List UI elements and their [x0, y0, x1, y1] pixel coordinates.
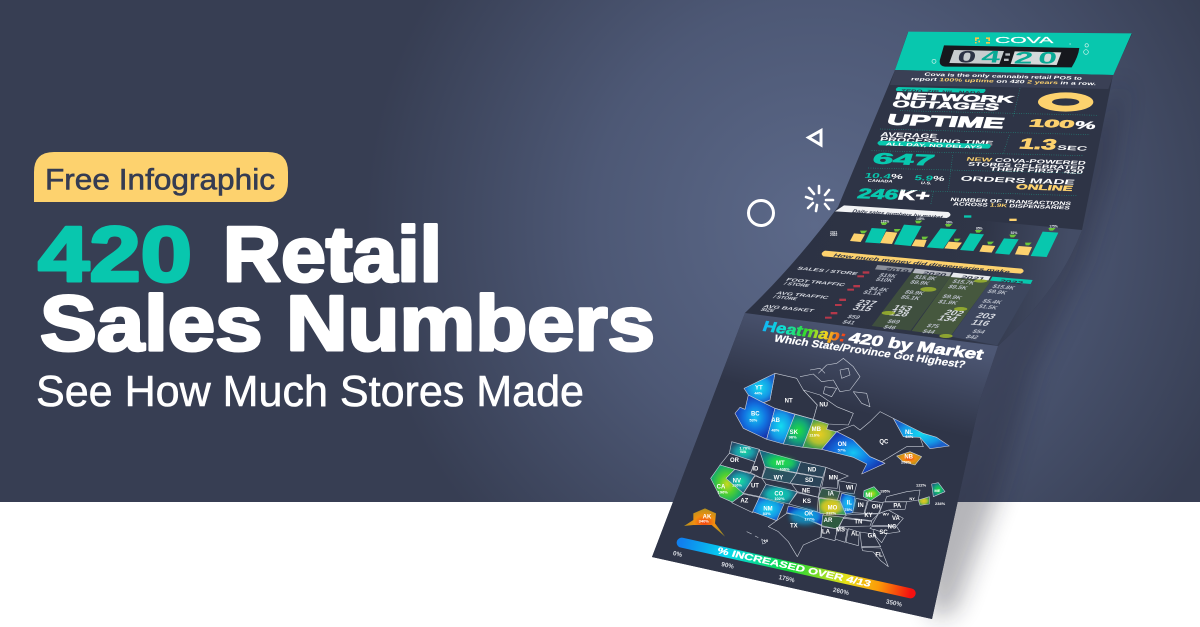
- subtitle: See How Much Stores Made: [36, 367, 584, 416]
- state labels: 232%: [826, 510, 837, 515]
- state labels: OR: [730, 458, 740, 464]
- stat: canada: [863, 172, 905, 184]
- province labels: 53%: [749, 417, 758, 422]
- table: row labels: AVG TRAFFIC: [774, 291, 831, 301]
- state labels: TX: [790, 524, 798, 530]
- table: values 2022: $1.5K: [976, 304, 999, 311]
- state labels: CO: [774, 492, 784, 498]
- state labels: UT: [751, 484, 759, 490]
- state labels: 122%: [916, 482, 927, 487]
- heading line 1: 420 by Market: [846, 331, 986, 363]
- NB: [897, 452, 922, 465]
- table: values 2019: [840, 273, 898, 326]
- table: row labels: / STORE: [771, 295, 800, 302]
- pill: zero zip nil nada: ZERO, ZIP, NIL, NADA: [900, 88, 982, 95]
- table heading pill: [822, 251, 1024, 275]
- province labels: NL: [905, 430, 913, 436]
- state labels: MS: [836, 528, 845, 534]
- table: values 2020: $46: [881, 325, 898, 331]
- province labels: [749, 385, 914, 464]
- table: values 2021: $9.5K: [946, 284, 969, 291]
- state labels: KY: [864, 513, 873, 519]
- table: values 2020: 128: [887, 309, 911, 319]
- state labels: AR: [824, 518, 833, 524]
- province labels: ON: [838, 442, 847, 448]
- state labels: WV: [883, 512, 889, 517]
- state labels: 340%: [699, 519, 709, 524]
- flip clock: 04:20: [940, 45, 1079, 68]
- logo: COVA: COVA: [995, 35, 1054, 45]
- state labels: AL: [851, 531, 859, 537]
- table: year headers: 2019: [883, 267, 910, 275]
- text: intro: Cova is the only cannabis retail POS to: [923, 72, 1083, 82]
- table: values 2019: $59: [845, 314, 862, 321]
- table: values 2022: 116: [968, 319, 992, 328]
- state labels: [699, 445, 946, 559]
- heat glows: [766, 458, 855, 525]
- intro band: [890, 70, 1113, 89]
- table: values 2019: $4.4K: [867, 286, 890, 293]
- text: number of transactions: [949, 197, 1073, 211]
- state labels: IN: [858, 503, 864, 509]
- SK: [783, 414, 813, 447]
- heatmap: map of Canada and USA (zoom space): [672, 358, 949, 609]
- province labels: NU: [819, 403, 828, 409]
- bar chart: 145%: [916, 217, 925, 221]
- table: values 2020: $9.9K: [908, 280, 931, 287]
- arctic islands: [800, 358, 870, 407]
- bar chart: 2021: [830, 230, 838, 234]
- state labels: OK: [804, 512, 814, 518]
- Alaska: [684, 508, 725, 537]
- chart heading banner: [835, 205, 950, 221]
- state labels: NM: [763, 506, 773, 512]
- text: orders made online: [959, 175, 1076, 193]
- flip clock: 04:20: 0: [1037, 49, 1059, 68]
- NT: [763, 373, 817, 419]
- state labels: VA: [892, 516, 901, 522]
- YT: [744, 373, 775, 403]
- bar chart: 52%: [1011, 231, 1017, 235]
- legend: scale labels: 0%: [672, 550, 683, 559]
- table: values 2021: $15.7K: [950, 279, 976, 286]
- table: values 2021: [920, 279, 976, 335]
- table: values 2020: 153: [890, 304, 915, 314]
- state labels: NY: [909, 496, 915, 501]
- panel: heatmap background: [652, 313, 998, 619]
- province labels: MB: [812, 427, 822, 433]
- province labels: 57%: [838, 447, 846, 452]
- table: row labels: [759, 266, 860, 314]
- panel: stats (zoom space): [855, 32, 1132, 211]
- legend: scale labels: [672, 550, 903, 609]
- stat: us: 5.9 %: [913, 174, 947, 183]
- state labels: ID: [752, 467, 759, 473]
- badge: Free Infographic: [34, 152, 288, 202]
- table: values 2020: $5.1K: [899, 295, 922, 302]
- table: values 2020: $9.9K: [903, 290, 926, 297]
- text: number of transactions: ACROSS 1.9K DISPENSARIES: [952, 201, 1071, 211]
- table: values 2022: $42: [964, 334, 980, 341]
- state labels: MT: [776, 461, 785, 467]
- map: Canada: [735, 358, 949, 474]
- table: highlight markers: [882, 279, 987, 338]
- state labels: ME: [934, 488, 941, 493]
- pill: all day, no delays: [877, 141, 991, 150]
- state labels: 78%: [844, 507, 853, 512]
- state labels: 177%: [804, 516, 815, 521]
- province labels: NT: [785, 398, 793, 404]
- table: year headers: [875, 265, 1033, 286]
- text: average processing time: AVERAGE: [879, 131, 939, 140]
- province labels: 48%: [771, 428, 780, 433]
- text: orders made online: ONLINE: [1015, 182, 1074, 193]
- state labels: CA: [717, 484, 726, 490]
- bar chart: 85%: [976, 226, 983, 230]
- state labels: GA: [868, 534, 877, 540]
- AB: [767, 408, 795, 444]
- province labels: BC: [751, 411, 760, 417]
- text: average processing time: [879, 131, 995, 147]
- NU: [803, 390, 853, 425]
- state labels: KS: [803, 499, 811, 505]
- province labels: 96%: [789, 435, 797, 440]
- table: values 2020: $69: [885, 319, 902, 325]
- chart heading banner: Daily sales numbers by market: [850, 209, 944, 221]
- state labels: 1.70%: [739, 445, 751, 450]
- table: values 2021: $75: [925, 323, 941, 330]
- table: values 2022: $54: [970, 329, 987, 335]
- table: values 2022: $9.9K: [985, 289, 1008, 296]
- bar chart: [830, 217, 1058, 257]
- icon: circle: [748, 200, 774, 226]
- title: 420 Retail Sales Numbers: Sales Numbers: [40, 279, 655, 367]
- province labels: 216%: [809, 433, 820, 438]
- flip clock: 04:20: 4: [980, 48, 1003, 67]
- state labels: MN: [829, 476, 838, 482]
- state labels: HI: [764, 538, 768, 543]
- text: 100%: 100: [1027, 118, 1076, 131]
- flip clock: 04:20: 0: [956, 47, 978, 66]
- state labels: NV: [733, 478, 741, 484]
- text: 100%: %: [1073, 120, 1098, 132]
- text: 246K+: 246 K+: [855, 186, 932, 204]
- state labels: 83%: [763, 511, 771, 516]
- state labels: 116%: [732, 482, 742, 487]
- panel: bar chart and table (zoom space): [759, 205, 1058, 345]
- icon: triangle: [808, 130, 821, 145]
- text: 647: 647: [870, 151, 936, 169]
- text: new cova stores: NEW COVA-POWERED: [965, 157, 1087, 167]
- chart legend: [964, 215, 1017, 221]
- table: values 2022: $5.4K: [980, 299, 1003, 306]
- table: values 2020: [881, 275, 938, 331]
- state labels: 106%: [779, 467, 790, 472]
- bar chart: 2022: [830, 233, 838, 237]
- state labels: NE: [802, 489, 810, 495]
- table: values 2019: $1.1K: [861, 290, 884, 297]
- province labels: SK: [790, 430, 799, 436]
- BC: [735, 395, 775, 439]
- table: values 2022: 203: [973, 312, 998, 321]
- state labels: 102%: [774, 496, 785, 501]
- stat: canada: CANADA: [867, 179, 894, 184]
- map: United States: [684, 442, 946, 567]
- text: network outages: OUTAGES: [891, 99, 1002, 113]
- state labels: FL: [875, 553, 883, 559]
- legend: scale labels: 350%: [885, 598, 903, 609]
- state labels: 234%: [935, 501, 946, 506]
- state labels: 196%: [718, 490, 728, 495]
- text: orders made online: ORDERS MADE: [959, 175, 1076, 187]
- state labels: IL: [847, 500, 852, 506]
- state labels: NC: [888, 524, 897, 530]
- badge: Free Infographic: Free Infographic: [45, 164, 275, 196]
- stat: us: [913, 174, 947, 185]
- table: row labels: SALES / STORE: [795, 266, 860, 277]
- sheet drop shadow: [900, 80, 1125, 619]
- text: new cova stores: [965, 157, 1087, 176]
- state labels: MI: [865, 493, 872, 499]
- stat: canada: 10.4 %: [863, 172, 905, 181]
- table: row labels: / STORE: [782, 281, 812, 289]
- state labels: SC: [879, 530, 888, 536]
- text: 100%: [1027, 118, 1098, 132]
- state labels: MO: [828, 505, 838, 511]
- province labels: NB: [904, 454, 914, 460]
- table: values 2021: 202: [942, 309, 966, 318]
- state labels: OH: [872, 505, 881, 511]
- panel: bar chart and table background: [745, 207, 1082, 346]
- province labels: 259%: [901, 459, 912, 464]
- table: values 2019: $10K: [874, 277, 895, 284]
- QC: [837, 412, 923, 462]
- text: 1.3 sec: SEC: [1056, 145, 1089, 153]
- table: values 2021: $1.9K: [936, 299, 959, 306]
- text: intro: report 100% uptime on 420 2 years in a row.: [910, 76, 1097, 87]
- pill: zero zip nil nada: [896, 87, 986, 95]
- state labels: WI: [846, 485, 854, 491]
- table: values 2022: [964, 284, 1016, 341]
- heading line 1: Heatmap:: [760, 319, 848, 345]
- MB: [803, 419, 837, 449]
- panel: sheet base: [652, 32, 1132, 619]
- state labels: TN: [854, 519, 862, 525]
- legend: scale labels: 260%: [832, 587, 850, 597]
- table: values 2022: $15.8K: [990, 284, 1016, 291]
- text: new cova stores: STORES CELEBRATED: [967, 162, 1086, 172]
- text: 1.3 sec: [1017, 136, 1089, 154]
- stat: us: U.S.: [920, 181, 932, 185]
- flip clock: 04:20: 2: [1013, 48, 1035, 67]
- ON: [822, 432, 885, 474]
- table: row labels: AVG BASKET: [761, 304, 815, 314]
- text: new cova stores: THEIR FIRST 420: [989, 167, 1084, 176]
- state labels: AZ: [740, 499, 749, 505]
- state labels: PA: [893, 503, 902, 509]
- heading line 1: [760, 319, 986, 363]
- table: year headers: 2022: [997, 279, 1025, 286]
- header band: [895, 32, 1132, 75]
- text: network outages: [891, 91, 1015, 113]
- table: values 2021: $44: [920, 329, 937, 335]
- table: row labels: FOOT TRAFFIC: [784, 277, 847, 288]
- legend: scale labels: 90%: [721, 561, 735, 571]
- table: values 2019: $41: [840, 320, 857, 326]
- state labels: SD: [805, 478, 814, 484]
- table: values 2021: $9.9K: [940, 294, 963, 301]
- background: white base: [0, 502, 1200, 627]
- table: year headers: 2021: [959, 275, 986, 282]
- NL: [893, 418, 949, 449]
- text: average processing time: PROCESSING TIME: [879, 136, 995, 147]
- table: values 2019: 315: [850, 304, 875, 314]
- text: number of transactions: NUMBER OF TRANSACTIONS: [949, 197, 1073, 207]
- state labels: IA: [828, 492, 835, 498]
- state labels: 195%: [880, 489, 891, 494]
- text: uptime: UPTIME: [885, 112, 1006, 132]
- table: flags: [825, 271, 869, 319]
- bar chart: 135%: [881, 220, 889, 224]
- pill: all day, no delays: ALL DAY, NO DELAYS: [885, 141, 983, 150]
- bar chart: 96%: [946, 220, 953, 224]
- state labels: WA: [740, 449, 747, 454]
- state labels: AK: [703, 515, 712, 521]
- legend: gradient bar: [682, 543, 911, 593]
- table: row labels: SIZE: [759, 307, 777, 314]
- state labels: ND: [808, 467, 817, 473]
- table: values 2021: 134: [935, 314, 960, 324]
- province labels: 64%: [905, 434, 914, 439]
- title: 420 Retail Sales Numbers: Retail: [223, 210, 442, 298]
- Hawaii: [747, 532, 766, 544]
- text: 1.3 sec: 1.3: [1017, 136, 1059, 154]
- legend: gradient bar: % INCREASED OVER 4/13: [716, 545, 872, 589]
- title: 420 Retail Sales Numbers: [38, 210, 655, 367]
- icon: burst: [806, 186, 833, 211]
- table: values 2020: $15.8K: [912, 275, 938, 282]
- logo: COVA: [975, 35, 1054, 45]
- province labels: 44%: [754, 390, 763, 395]
- text: intro: [910, 72, 1097, 87]
- title: 420 Retail Sales Numbers: 420: [38, 210, 192, 298]
- clock decor icons: [932, 44, 1088, 63]
- table: values 2019: 237: [854, 299, 879, 308]
- table heading pill: How much money did dispensaries make: [831, 253, 1011, 275]
- heading line 2: Which State/Province Got Highest?: [772, 334, 967, 371]
- province labels: AB: [771, 418, 781, 424]
- bar chart: 175%: [1049, 224, 1058, 228]
- table: values 2019: $15K: [877, 273, 898, 279]
- heading: heatmap: [760, 319, 986, 371]
- province labels: QC: [879, 439, 889, 445]
- text: network outages: NETWORK: [893, 91, 1015, 106]
- table: column backgrounds: [872, 271, 1033, 345]
- state labels: LA: [822, 530, 831, 536]
- state labels: WY: [774, 476, 783, 482]
- zero ring: [1038, 92, 1093, 112]
- infographic sheet: [652, 32, 1132, 619]
- table: year headers: 2020: [920, 271, 948, 278]
- province labels: YT: [755, 385, 763, 391]
- legend: scale labels: 175%: [778, 574, 796, 584]
